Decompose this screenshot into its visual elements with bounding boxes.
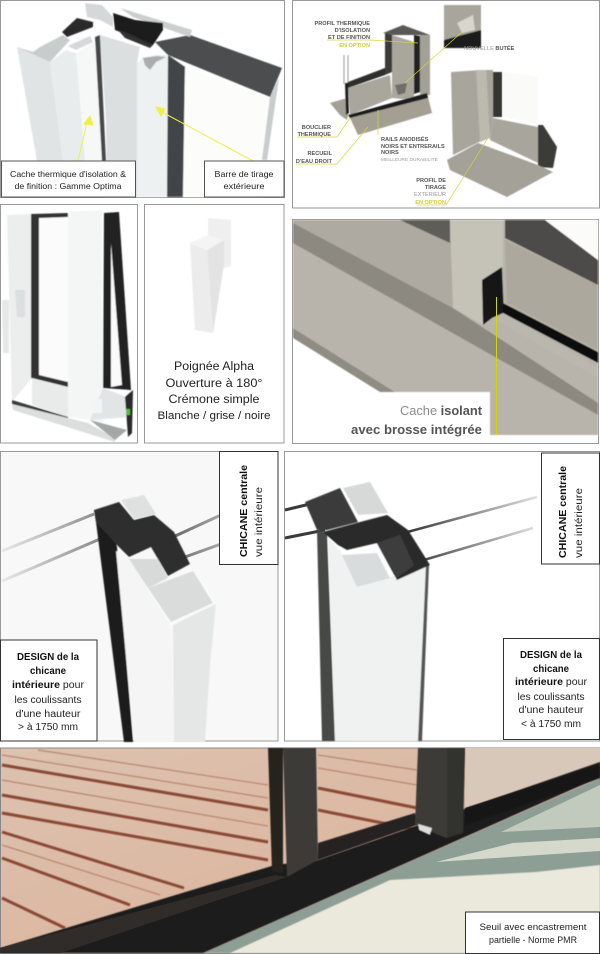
label: design chicane: intérieure pour [12,680,85,691]
label: bouclier thermique [297,125,331,138]
profile photo [17,3,282,197]
chicane section [305,482,430,741]
panel: seuil PMR [0,748,600,954]
panel: chicane hauteur inférieure [284,452,600,741]
label: cache isolant: Cache isolant [400,403,483,418]
label: chicane centrale: CHICANE centrale [238,465,250,557]
glass area [465,748,600,808]
label: profil thermique: EN OPTION [339,43,370,49]
glazing lines [2,514,221,581]
arrow: barre de tirage [156,107,253,161]
panel: cache thermique [0,0,284,198]
label: design chicane: d'une hauteur [518,705,584,716]
rail photo [293,220,598,435]
icon: poignée [190,218,231,333]
label: rails anodisés: NOIRS [381,150,399,156]
label: barre de tirage [204,161,284,197]
caption: poignée [158,361,270,422]
label: chicane centrale [542,453,600,564]
label: rails anodisés: RAILS ANODISÉS [381,135,429,143]
label: design chicane [0,640,97,741]
caption: poignée: Ouverture à 180° [166,378,262,390]
panel: cache isolant [292,220,598,444]
tile floor [203,778,600,953]
chicane section [94,495,217,742]
label: design chicane: chicane [30,666,67,677]
label: barre de tirage: extérieure [224,181,265,191]
label: profil de tirage: PROFIL DE [416,178,446,184]
arrow: cache thermique [78,116,93,161]
label: rails anodisés: MEILLEURE DURABILITÉ [381,156,438,163]
label: design chicane: > à 1750 mm [18,722,78,733]
label: profil thermique: ET DE FINITION [328,35,370,41]
label: design chicane: DESIGN de la [520,650,583,661]
label: rails anodisés: NOIRS ET ENTRERAILS [381,144,445,150]
caption: poignée: Crémone simple [168,394,260,406]
panel: détails coulissant [292,0,600,208]
label: bouclier thermique: THERMIQUE [297,132,331,138]
label: recueil d'eau: RECUEIL [307,151,333,157]
label: profil de tirage [414,178,446,206]
label: design chicane: les coulissants [518,692,585,703]
label: barre de tirage: Barre de tirage [214,169,274,179]
label: design chicane: chicane [533,664,570,675]
label: seuil PMR: partielle - Norme PMR [489,935,577,945]
label: seuil PMR: Seuil avec encastrement [480,922,587,932]
label: design chicane [504,638,600,740]
label: design chicane: les coulissants [14,695,82,706]
label: chicane centrale: vue intérieure [574,487,585,558]
panel: poignée alpha [144,204,284,443]
label: design chicane: intérieure pour [515,677,588,688]
label: profil thermique [314,21,370,49]
label: design chicane: DESIGN de la [17,652,80,663]
window section [2,210,133,442]
caption: poignée: Blanche / grise / noire [158,410,270,422]
label: recueil d'eau: D'EAU DROIT [296,159,333,165]
label: nouvelle butée: NOUVELLE BUTÉE [464,44,515,52]
caption: poignée: Poignée Alpha [174,361,255,373]
label: cache isolant: avec brosse intégrée [351,422,482,437]
label: cache isolant [351,403,483,437]
label: cache thermique: de finition : Gamme Optima [14,181,122,191]
panel: ouvrant blanc [0,204,138,443]
arrow: cache [496,297,498,435]
label: seuil PMR [466,912,600,954]
label: profil de tirage: TIRAGE [425,185,446,191]
label: chicane centrale: CHICANE centrale [557,466,569,558]
threshold [0,762,600,953]
label: rails anodisés [381,135,445,163]
label: recueil d'eau [296,151,333,165]
label: cache thermique [2,161,136,197]
wood planks [2,750,560,928]
label: chicane centrale [220,452,278,564]
label: bouclier thermique: BOUCLIER [302,125,331,131]
label: design chicane: < à 1750 mm [521,719,581,730]
label: chicane centrale: vue intérieure [254,486,265,557]
panel: chicane hauteur supérieure [0,452,278,742]
label: cache thermique: Cache thermique d'isolation & [10,169,126,179]
label: profil de tirage: EN OPTION [415,200,446,206]
leader lines [296,32,488,205]
label: profil thermique: D'ISOLATION [335,28,370,34]
window views [330,5,557,197]
label: design chicane: d'une hauteur [16,709,81,720]
label: profil de tirage: EXTÉRIEUR [414,191,446,198]
label: profil thermique: PROFIL THERMIQUE [314,21,370,27]
sliding frame [268,748,600,877]
glazing lines [285,497,537,562]
